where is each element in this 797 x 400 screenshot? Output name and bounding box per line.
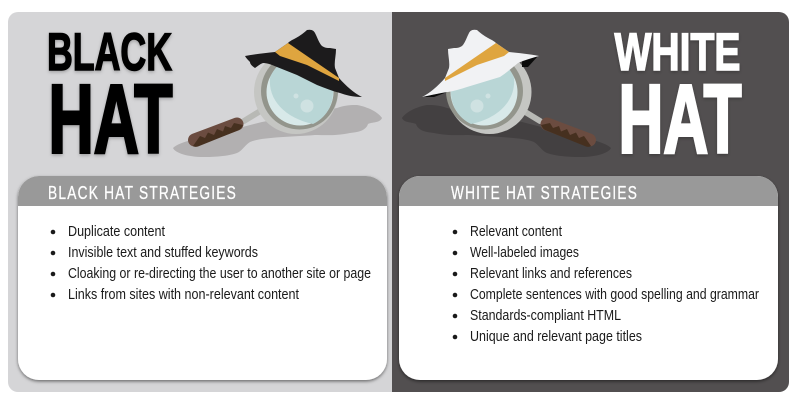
bullet list: white hat strategies: Unique and relevant page titles	[470, 329, 642, 345]
bullet list: white hat strategies	[453, 224, 759, 345]
header bar: black hat strategies	[18, 176, 387, 206]
bullet list: white hat strategies: Well-labeled images	[470, 245, 579, 261]
bullet list: white hat strategies: Relevant content	[470, 224, 562, 240]
panel: white hat background	[392, 12, 789, 392]
title: white hat	[614, 23, 742, 174]
title: white hat: WHITE	[614, 23, 740, 82]
title: black hat	[47, 23, 172, 174]
heading: white hat strategies: WHITE HAT STRATEGIES	[451, 183, 638, 203]
bullet list: white hat strategies: Relevant links and references	[470, 266, 632, 282]
bullet list: black hat strategies: Cloaking or re-directing the user to another site or page	[68, 266, 371, 282]
panel: black hat strategies card	[18, 176, 387, 380]
bullet list: black hat strategies: Invisible text and stuffed keywords	[68, 245, 258, 261]
bullet list: white hat strategies: Standards-compliant HTML	[470, 308, 621, 324]
title: black hat: HAT	[48, 64, 172, 174]
icon: magnifying glass with black hat	[173, 30, 382, 157]
panel: black hat background	[8, 12, 392, 392]
header bar: white hat strategies	[399, 176, 778, 206]
icon: magnifying glass with white hat	[402, 30, 611, 157]
panel: white hat strategies card	[399, 176, 778, 380]
bullet list: black hat strategies: Duplicate content	[68, 224, 165, 240]
bullet list: black hat strategies: Links from sites with non-relevant content	[68, 287, 299, 303]
heading: black hat strategies: BLACK HAT STRATEGIES	[48, 183, 237, 203]
title: black hat: BLACK	[47, 23, 172, 82]
bullet list: black hat strategies	[51, 224, 371, 303]
